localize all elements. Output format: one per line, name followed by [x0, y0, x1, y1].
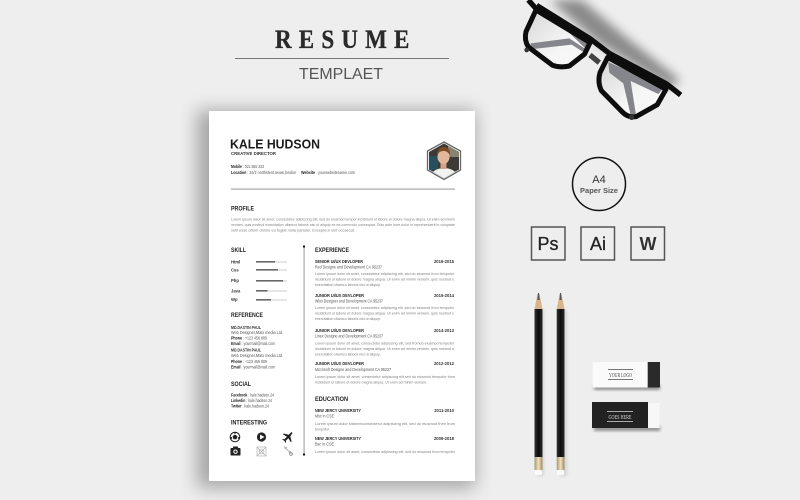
job 4 — [315, 361, 456, 384]
contact details — [231, 164, 355, 175]
job 3: incididunt ut labore et dolore magna aliqua. Ut enim ad minim veniam, quis nostrud s — [315, 346, 454, 351]
section: skill — [231, 247, 287, 302]
contact details: Location : 34/2 northstent.texas,london — [231, 170, 297, 175]
badge: A4 paper size: A4 — [592, 174, 606, 186]
section: reference: MD.DASTIN PAUL — [231, 325, 261, 330]
section: interesting — [230, 420, 292, 456]
education entry 1: Lorem ipsum dolor sitametconsectetur adipiscing elit, sed do eiusmod then from — [315, 421, 456, 426]
job 1: Lorem ipsum dolor sit amet, consectetur adipiscing elit, sed do eiusmod from tempofor — [315, 271, 455, 276]
section: social: Twiter : kale.hadson.24 — [231, 404, 270, 408]
education entry 1: NEW JERCY UNIVERSITY — [315, 408, 361, 413]
section: reference: Web Designer,Matx media Ltd. — [231, 330, 283, 335]
job 1: 2016-2015 — [434, 259, 455, 264]
section: profile: PROFILE — [231, 206, 255, 212]
icon: Photoshop: Ps — [537, 234, 559, 254]
job 2: incididunt ut labore et dolore magna aliqua. Ut enim ad minim veniam, quis nostrud s — [315, 310, 454, 316]
section: profile: veniam, quis nostrud exercitation ullamco laboris nisi ut aliquip ex ea commodo consequat. Duis aute irure dolor in reprehenderit in voluptate — [231, 222, 456, 227]
job 3 — [315, 328, 455, 356]
section: education: EDUCATION — [315, 396, 348, 403]
icon: guitar outline — [284, 446, 292, 456]
section: social: Linkedin : kale.hadson.24 — [231, 398, 273, 403]
job 3: Linex Designe and Development CA 95237 — [315, 334, 384, 338]
skill bars: Java — [231, 288, 241, 294]
section: experience — [315, 247, 456, 384]
glasses frame — [525, 0, 681, 117]
education entry 2: 2009-2018 — [434, 436, 455, 441]
icon: plane — [282, 432, 292, 443]
glasses lenses — [526, 10, 589, 66]
education entry 1: 2011-2010 — [434, 408, 455, 413]
glasses — [524, 0, 681, 120]
education entry 2: Lorem ipsum dolor sit amet, consectetur adipiscing elit, sed do eiusmod from tempofor — [315, 449, 456, 454]
education entry 2: Bsc in CSE — [315, 442, 334, 446]
eraser: your logo: YOUR LOGO — [609, 373, 632, 379]
section: reference — [231, 312, 283, 370]
job 3: JUNIOR UI/UX DEVLOPER — [315, 328, 364, 333]
job 4: 2012-2012 — [434, 361, 455, 366]
eraser: goes here: GOES HERE — [608, 415, 632, 421]
job 4: Microsoft Designe and Development CA 95237 — [315, 367, 392, 372]
eraser: your logo — [593, 362, 660, 390]
divider — [231, 188, 455, 190]
title divider — [235, 58, 449, 59]
job 2: Lorem ipsum dolor sit amet, consectetur adipiscing elit, sed do eiusmod from tempofor — [315, 305, 455, 310]
pencil 2 — [557, 293, 567, 476]
section: profile — [231, 206, 456, 232]
education entry 2: NEW JERCY UNIVERSITY — [315, 436, 361, 441]
job 1: SENIOR UI/UX DEVLOPER — [315, 259, 363, 264]
section: skill: SKILL — [231, 247, 246, 254]
job 1 — [315, 259, 455, 287]
job 3: exercitation ullamco laboris nisi ut aliquip. — [315, 352, 381, 356]
job 2: exercitation ullamco laboris nisi ut aliquip. — [315, 316, 381, 321]
eraser: goes here — [592, 402, 660, 431]
timeline divider — [303, 246, 305, 456]
education entry 1 — [315, 408, 456, 432]
contact details: Mobile : 021 555 333 — [231, 164, 265, 169]
job 1: Red Designe and Development CA 95237 — [315, 264, 383, 270]
section: interesting: INTERESTING — [231, 420, 267, 426]
education entry 1: Msc in CSE — [315, 414, 334, 418]
icon: Illustrator — [581, 227, 614, 260]
icon: Illustrator: Ai — [590, 234, 606, 254]
badge: A4 paper size: Paper Size — [580, 186, 618, 195]
icon: play — [257, 432, 266, 442]
job 2 — [315, 293, 455, 321]
job 2: Wlox Designer and Development CA 95237 — [315, 298, 384, 304]
section: profile: velit esse cillum dolore eu fugiat nulla pariatur. Excepteur sint occaecat. — [231, 228, 355, 232]
job 4: incididunt ut labore et dolore magna aliqua. Ut enim ad minim veniam. — [315, 380, 427, 384]
skill bars: Html — [231, 260, 240, 264]
job 3: Lorem ipsum dolor sit amet, consectetur adipiscing elit, sed fromdo eiusmod tempofor — [315, 340, 455, 346]
job 3: 2014-2013 — [434, 328, 455, 333]
section: reference: MD.DASTIN PAUL — [231, 348, 261, 352]
job 2: JUNIOR UI/UX DEVLOPER — [315, 293, 364, 298]
section: profile: Lorem ipsum dolor sit amet, consectetur adipiscing elit, sed do eiusmod tempor incididunt ut labore et dolore magna aliqua. Ut enim ad minim — [231, 216, 456, 222]
skill bars: Css — [231, 268, 239, 272]
section: social — [231, 381, 275, 408]
skill bars: Wp — [231, 297, 238, 302]
icon: map outline — [257, 447, 266, 456]
icon: hexagon portrait — [426, 141, 462, 180]
badge: A4 paper size — [572, 158, 626, 210]
section: experience: EXPERIENCE — [315, 247, 350, 254]
subtitle: TEMPLAET: TEMPLAET — [299, 66, 383, 83]
icon: camera — [230, 446, 240, 456]
education entry 2 — [315, 436, 456, 454]
contact details: Website : yourwebsitename.com — [301, 170, 355, 175]
education entry 1: tempofor. — [315, 426, 330, 432]
section: reference: Web Designer,Matx media Ltd. — [231, 353, 283, 358]
section: reference: Phone : +123 456 889 — [231, 359, 268, 364]
icon: Word — [631, 227, 664, 260]
section: social: SOCIAL — [231, 381, 251, 388]
glasses temple arms — [530, 14, 664, 115]
pencil 1 — [534, 293, 544, 476]
job 1: exercitation ullamco laboris nisi ut aliquip. — [315, 282, 381, 287]
job title: CREATIVE DIRECTOR — [231, 151, 276, 157]
section: reference: Phone : +123 456 889 — [231, 336, 268, 340]
job 2: 2015-2014 — [434, 293, 455, 298]
icon: Word: W — [640, 234, 656, 254]
skill bars — [231, 260, 287, 302]
skill bars: Php — [231, 278, 239, 283]
glasses shadow — [550, 0, 680, 87]
job 4: JUNIOR UI/UX DEVLOPER — [315, 361, 364, 366]
section: reference: Email : yourmail@mail.com — [231, 364, 275, 370]
section: reference: REFERENCE — [231, 312, 264, 319]
section: education — [315, 396, 456, 454]
title: RESUME: RESUME — [275, 25, 417, 54]
section: social: Facebook : kale.hadson.24 — [231, 392, 275, 398]
section: reference: Email : yourmail@mail.com — [231, 341, 275, 346]
icon: Photoshop — [532, 227, 565, 260]
heading: name: KALE HUDSON — [230, 136, 320, 152]
job 4: Lorem ipsum dolor sit amet, consectetur adipiscing elit,sed do eiusmod tempofor from — [315, 374, 456, 379]
icon: football — [230, 432, 240, 442]
job 1: incididunt ut labore et dolore magna aliqua. Ut enim ad minim veniam, quis nostrud s — [315, 276, 454, 282]
paper shadow — [197, 110, 475, 488]
panel: resume sheet — [209, 111, 475, 481]
